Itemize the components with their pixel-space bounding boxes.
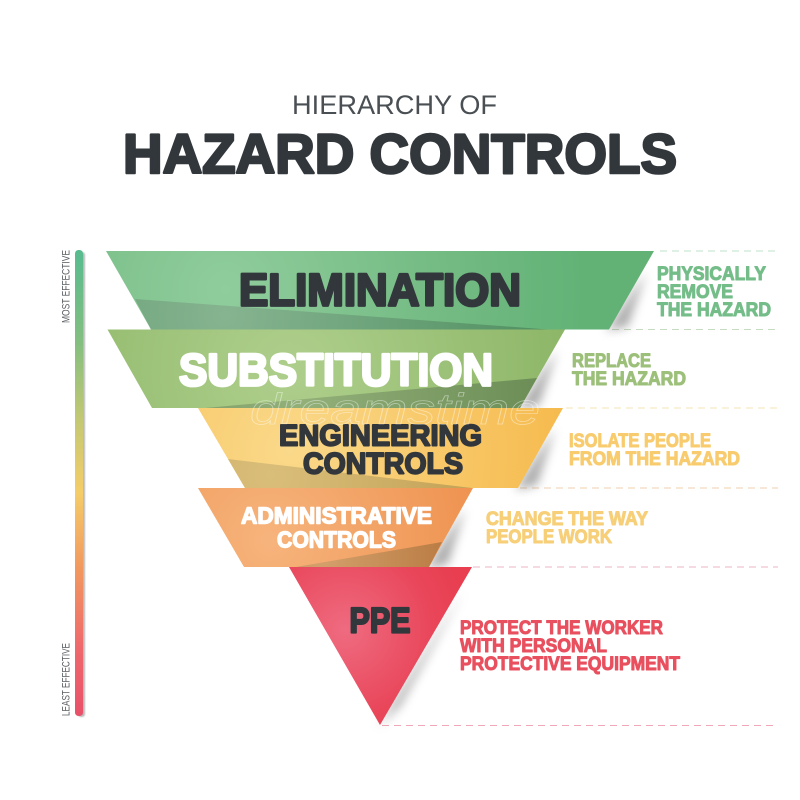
tier: engineering controls: CONTROLS <box>303 448 463 480</box>
label: protect the worker: WITH PERSONAL <box>460 636 607 657</box>
label: change the way people work <box>486 509 648 548</box>
watermark: dreamstime <box>250 385 540 434</box>
tier: elimination: ELIMINATION <box>239 264 521 316</box>
tier: engineering controls: ENGINEERING <box>279 420 482 452</box>
tier: administrative controls: ADMINISTRATIVE <box>241 502 432 528</box>
label: change the way people work: CHANGE THE WAY <box>486 509 648 530</box>
label: protect the worker: PROTECT THE WORKER <box>460 618 663 639</box>
label: replace the hazard <box>572 351 686 390</box>
title: HAZARD CONTROLS <box>123 122 677 185</box>
tier: PPE: PPE <box>350 602 410 640</box>
effectiveness scale: LEAST EFFECTIVE <box>60 643 72 716</box>
title <box>123 90 677 185</box>
title: HIERARCHY OF <box>292 90 497 120</box>
label: protect the worker: PROTECTIVE EQUIPMENT <box>460 654 680 675</box>
effectiveness scale: MOST EFFECTIVE <box>60 250 72 323</box>
label: replace the hazard: REPLACE <box>572 351 651 372</box>
label: physically remove the hazard: THE HAZARD <box>657 300 771 321</box>
label: replace the hazard: THE HAZARD <box>572 369 686 390</box>
label: isolate people from the hazard <box>569 431 740 470</box>
dashed guide lines <box>382 251 778 726</box>
label: physically remove the hazard <box>657 264 771 321</box>
tier: engineering controls <box>198 408 563 488</box>
tier: substitution <box>108 330 565 408</box>
label: isolate people from the hazard: FROM THE HAZARD <box>569 449 740 470</box>
tier: PPE <box>289 567 472 725</box>
funnel shadows <box>378 272 646 727</box>
label: physically remove the hazard: REMOVE <box>657 282 733 303</box>
label: protect the worker <box>460 618 680 675</box>
tier: administrative controls: CONTROLS <box>277 526 396 552</box>
tier: substitution: SUBSTITUTION <box>179 344 493 396</box>
label: physically remove the hazard: PHYSICALLY <box>657 264 766 285</box>
label: change the way people work: PEOPLE WORK <box>486 527 612 548</box>
tier: administrative controls <box>198 488 473 567</box>
label: isolate people from the hazard: ISOLATE PEOPLE <box>569 431 711 452</box>
effectiveness scale <box>60 250 85 717</box>
tier: elimination <box>106 251 654 330</box>
